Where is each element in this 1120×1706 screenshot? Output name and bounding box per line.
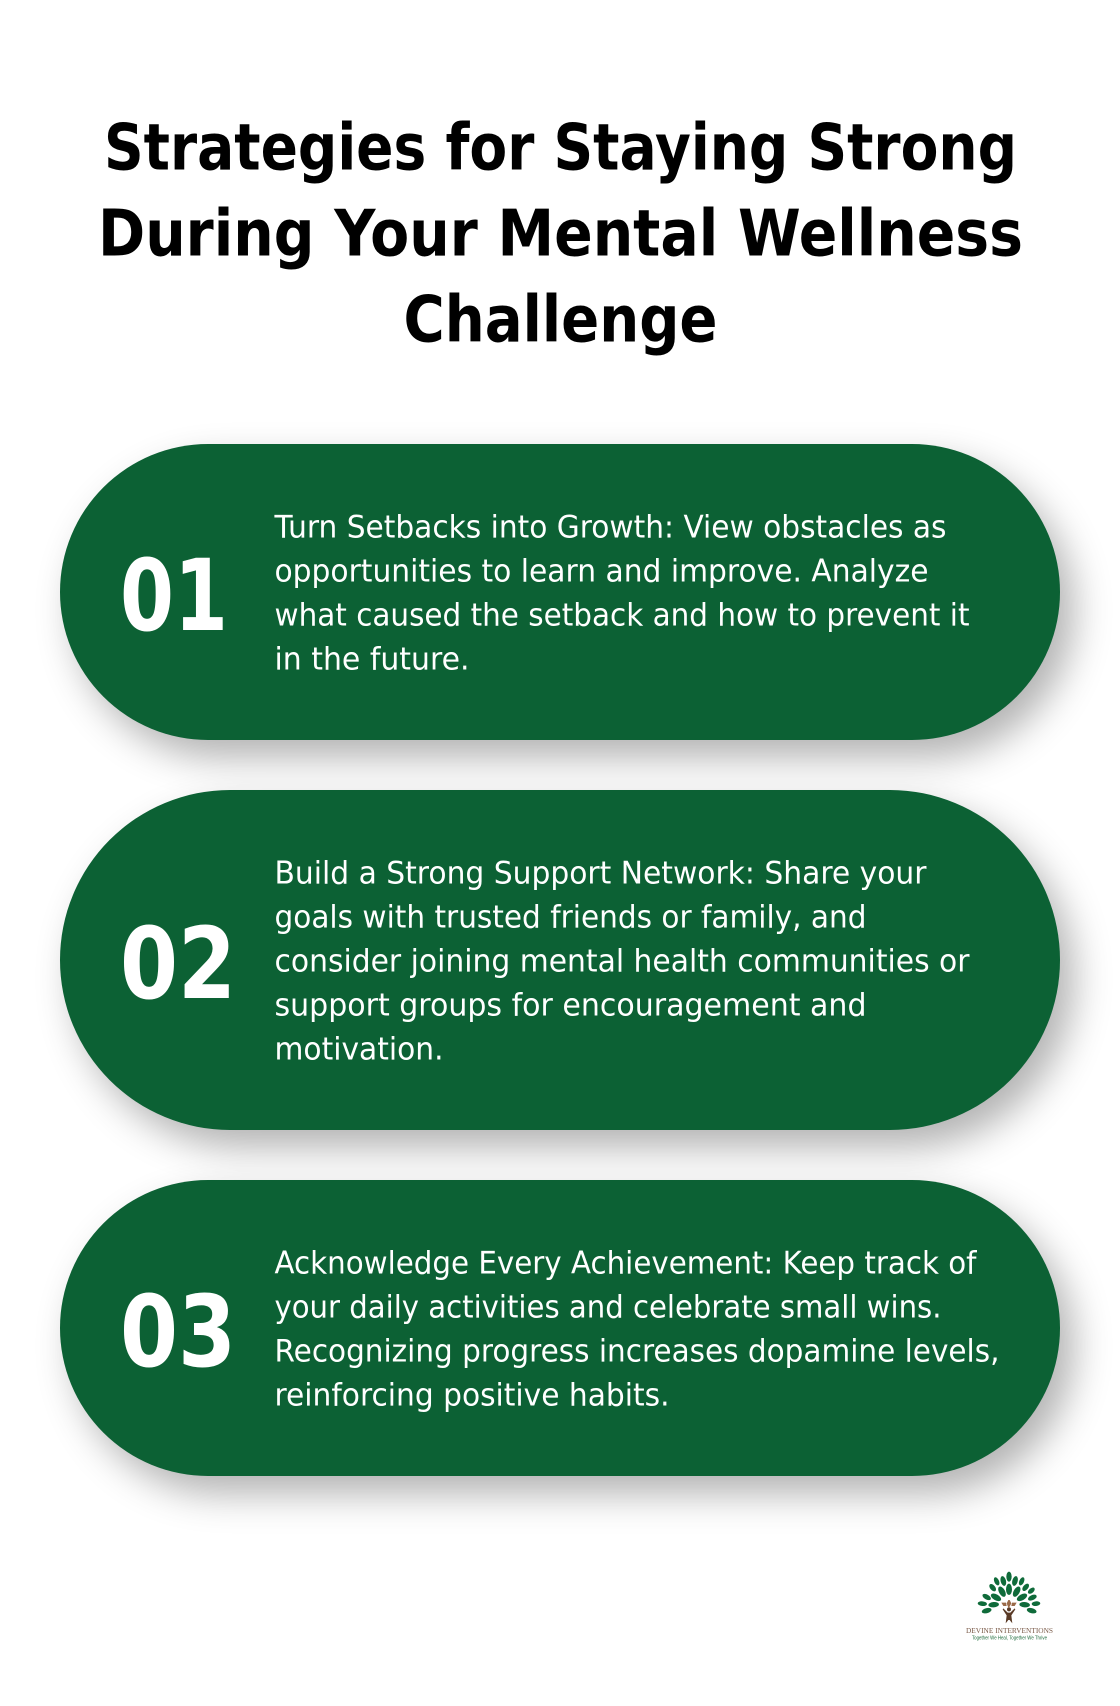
text: acknowledge every achievement: Recognizing progress increases dopamine levels, (274, 1334, 1000, 1370)
text: turn setbacks into growth: Turn Setbacks into Growth: View obstacles as (274, 510, 946, 546)
text: build a strong support network: goals with trusted friends or family, and (274, 900, 866, 936)
icon: tree leaves (977, 1572, 1041, 1614)
text: build a strong support network: support groups for encouragement and (274, 988, 866, 1024)
icon: tree trunk figure (1001, 1600, 1017, 1623)
text: build a strong support network (274, 856, 970, 1068)
text: acknowledge every achievement: reinforcing positive habits. (274, 1378, 670, 1414)
text: build a strong support network: Build a Strong Support Network: Share your (274, 856, 927, 892)
panel: strategy 02 (60, 790, 1060, 1130)
text: turn setbacks into growth: opportunities to learn and improve. Analyze (274, 554, 928, 590)
logo: devine interventions (966, 1572, 1053, 1642)
text: build a strong support network: consider joining mental health communities or (274, 944, 970, 980)
text: acknowledge every achievement: Acknowledge Every Achievement: Keep track of (274, 1246, 977, 1282)
panel: strategy 01 (60, 444, 1060, 740)
text: turn setbacks into growth: in the future. (274, 642, 470, 678)
logo name: DEVINE INTERVENTIONS (966, 1627, 1053, 1635)
title: Challenge (404, 282, 718, 358)
title (98, 110, 1023, 358)
text: turn setbacks into growth: what caused the setback and how to prevent it (274, 598, 970, 634)
number 01: 01 (120, 539, 228, 654)
title: During Your Mental Wellness (98, 196, 1023, 272)
number 02: 02 (120, 907, 236, 1022)
text: turn setbacks into growth (274, 510, 970, 678)
panel: strategy 03 (60, 1180, 1060, 1476)
text: build a strong support network: motivation. (274, 1032, 444, 1068)
text: acknowledge every achievement: your daily activities and celebrate small wins. (274, 1290, 942, 1326)
number 03: 03 (120, 1275, 236, 1390)
logo tagline: Together We Heal, Together We Thrive (972, 1636, 1047, 1642)
text: acknowledge every achievement (274, 1246, 1000, 1414)
